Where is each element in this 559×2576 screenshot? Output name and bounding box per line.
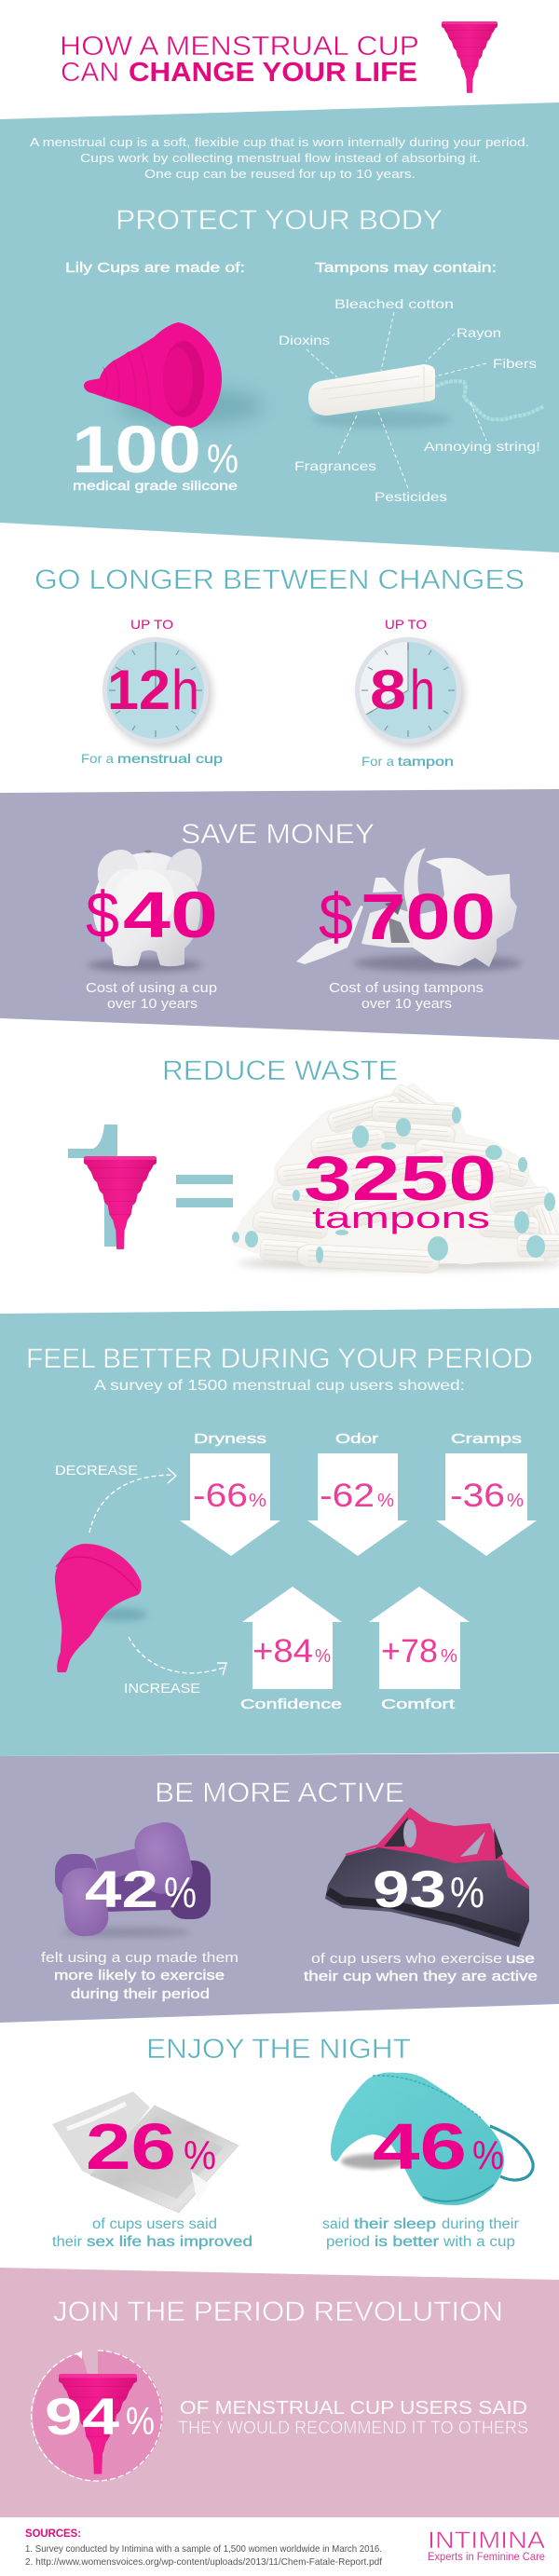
stat arrow: confidence bbox=[240, 1587, 342, 1712]
caption: 93 percent: use bbox=[506, 1951, 535, 1967]
clock: 8 hours: h bbox=[410, 659, 435, 721]
caption: 42 percent: during their period bbox=[71, 1986, 210, 2002]
intro paragraph bbox=[30, 135, 529, 181]
equals sign bbox=[176, 1175, 233, 1207]
tampon ingredient callouts bbox=[279, 296, 540, 504]
purple band background bbox=[0, 789, 559, 1040]
panel: footer bbox=[25, 2528, 545, 2568]
caption: medical grade silicone: medical grade silicone bbox=[73, 478, 238, 493]
arrow: increase curve bbox=[129, 1637, 226, 1675]
stat: 94 percent bbox=[45, 2387, 155, 2446]
stat arrow: comfort: Comfort bbox=[381, 1697, 456, 1712]
caption: 26 percent: sex life has improved bbox=[87, 2234, 252, 2250]
panel: go longer between changes bbox=[34, 565, 525, 769]
purple band background bbox=[0, 1753, 559, 2023]
tampon ingredient callouts: Bleached cotton bbox=[334, 296, 454, 311]
illustration: condom packets bbox=[52, 2092, 239, 2213]
subheading: tampons: Tampons may contain: bbox=[315, 260, 497, 276]
stat arrow: cramps bbox=[436, 1431, 537, 1556]
caption: menstrual cup: For a bbox=[81, 751, 114, 766]
illustration: tilted silicone cup bbox=[84, 322, 222, 429]
stat arrow: dryness: Dryness bbox=[194, 1431, 266, 1447]
caption: tampon cost bbox=[329, 981, 484, 1012]
clock: 12 hours: 12 bbox=[107, 659, 170, 721]
stat arrow: odor bbox=[307, 1431, 408, 1556]
panel: join the period revolution bbox=[0, 2268, 559, 2517]
chart: 94 percent circle bbox=[32, 2348, 163, 2481]
stat arrow: cramps: % bbox=[507, 1491, 524, 1511]
illustration: dumbbells bbox=[55, 1818, 211, 1938]
illustration: pile of tampons bbox=[231, 1083, 559, 1274]
heading: FEEL BETTER DURING YOUR PERIOD bbox=[26, 1343, 533, 1374]
stat: 26 percent bbox=[86, 2110, 216, 2183]
illustration: tilted cup bbox=[55, 1544, 147, 1672]
caption: 26 percent: of cups users said bbox=[92, 2216, 217, 2232]
stat arrow: odor: Odor bbox=[335, 1431, 378, 1447]
stat: 42 percent bbox=[85, 1860, 197, 1918]
intro paragraph: Cups work by collecting menstrual flow instead of absorbing it. bbox=[80, 151, 481, 165]
sources bbox=[25, 2528, 382, 2568]
stat: 100 percent bbox=[72, 414, 239, 487]
panel: feel better during your period bbox=[0, 1308, 559, 1756]
stat arrow: dryness: -66 bbox=[193, 1478, 248, 1514]
heading: BE MORE ACTIVE bbox=[155, 1778, 404, 1808]
caption: 93 percent bbox=[304, 1951, 538, 1984]
title: CAN bbox=[61, 58, 119, 88]
numeral one bbox=[68, 1124, 117, 1247]
up to label left: UP TO bbox=[130, 617, 173, 632]
stat: 700 dollars bbox=[319, 880, 496, 953]
illustration: sports bra bbox=[325, 1807, 529, 1947]
stat arrow: odor: % bbox=[377, 1491, 394, 1511]
stat: 40 dollars: $ bbox=[86, 879, 119, 951]
caption: 46 percent: is better bbox=[375, 2234, 439, 2250]
panel: protect your body bbox=[0, 102, 559, 552]
caption: tampon cost: Cost of using tampons bbox=[329, 981, 484, 996]
clock: 12 hours: h bbox=[171, 659, 199, 721]
caption: cup cost: Cost of using a cup bbox=[86, 981, 217, 996]
up to label right: UP TO bbox=[385, 617, 427, 632]
arrow: decrease curve bbox=[89, 1468, 176, 1533]
stat: 100 percent: 100 bbox=[72, 414, 201, 487]
caption: 93 percent: their cup when they are active bbox=[304, 1969, 538, 1984]
stat arrow: dryness: % bbox=[249, 1491, 266, 1511]
text: recommendation: OF MENSTRUAL CUP USERS SAID bbox=[180, 2398, 527, 2419]
text: recommendation bbox=[178, 2398, 528, 2438]
panel: save money bbox=[0, 789, 559, 1040]
heading: PROTECT YOUR BODY bbox=[116, 205, 443, 236]
tampon ingredient callouts: Dioxins bbox=[279, 333, 330, 348]
stat arrow: cramps: Cramps bbox=[451, 1431, 522, 1447]
stat: 94 percent: % bbox=[126, 2399, 155, 2443]
shadow: cup bbox=[118, 388, 264, 425]
icon: menstrual cup bbox=[442, 21, 498, 93]
stat: 40 dollars bbox=[86, 879, 218, 951]
caption: 42 percent: felt using a cup made them bbox=[41, 1950, 239, 1966]
sources: SOURCES: bbox=[25, 2528, 81, 2540]
heading: SAVE MONEY bbox=[181, 819, 375, 850]
sources: 1. Survey conducted by Intimina with a sample of 1,500 women worldwide in March 2016. bbox=[25, 2543, 382, 2555]
caption: cup cost: over 10 years bbox=[107, 997, 198, 1012]
stat: 26 percent: 26 bbox=[86, 2110, 176, 2183]
panel: reduce waste bbox=[68, 1056, 559, 1274]
stat: 94 percent: 94 bbox=[45, 2387, 119, 2446]
caption: 93 percent: of cup users who exercise bbox=[311, 1951, 502, 1967]
tampon ingredient callouts: Fragrances bbox=[294, 458, 376, 473]
stat arrow: odor: -62 bbox=[320, 1478, 375, 1514]
caption: 26 percent bbox=[52, 2216, 252, 2250]
heading: JOIN THE PERIOD REVOLUTION bbox=[53, 2297, 503, 2327]
label: increase: INCREASE bbox=[124, 1681, 200, 1697]
logo: intimina: INTIMINA bbox=[428, 2528, 545, 2554]
caption: 46 percent: said bbox=[322, 2216, 349, 2232]
caption: menstrual cup: menstrual cup bbox=[117, 751, 223, 766]
stat: 26 percent: % bbox=[184, 2133, 216, 2178]
teal band background bbox=[0, 1308, 559, 1756]
stat: 93 percent: 93 bbox=[373, 1860, 446, 1918]
panel: be more active bbox=[0, 1753, 559, 2023]
stat: 46 percent bbox=[373, 2110, 504, 2183]
title bbox=[60, 32, 419, 88]
subheading: survey: A survey of 1500 menstrual cup users showed: bbox=[94, 1378, 465, 1394]
tampon ingredient callouts: Pesticides bbox=[375, 489, 447, 504]
stat: 40 dollars: 40 bbox=[123, 879, 218, 951]
stat: 42 percent: % bbox=[164, 1868, 197, 1916]
stat arrow: comfort: % bbox=[441, 1646, 457, 1667]
sources: 2. http://www.womensvoices.org/wp-content/uploads/2013/11/Chem-Fatale-Report.pdf bbox=[25, 2556, 382, 2568]
caption: cup cost bbox=[86, 981, 217, 1012]
subheading: lily cups: Lily Cups are made of: bbox=[65, 260, 245, 276]
illustration: sleep mask bbox=[331, 2072, 533, 2205]
panel: enjoy the night bbox=[52, 2034, 533, 2250]
heading: GO LONGER BETWEEN CHANGES bbox=[34, 565, 525, 595]
caption: tampon: tampon bbox=[398, 754, 454, 769]
illustration: broken piggy bank bbox=[296, 848, 522, 972]
stat: 700 dollars: $ bbox=[319, 880, 353, 953]
caption: 46 percent bbox=[322, 2216, 519, 2250]
caption: 46 percent: period bbox=[326, 2234, 370, 2250]
stat: 93 percent: % bbox=[450, 1868, 484, 1916]
caption: tampon bbox=[361, 754, 454, 769]
stat arrow: confidence: % bbox=[315, 1646, 331, 1667]
tampon ingredient callouts: Annoying string! bbox=[424, 439, 540, 454]
stat arrow: confidence: +84 bbox=[252, 1633, 313, 1670]
caption: 42 percent bbox=[41, 1950, 239, 2002]
stat: 3250 tampons: 3250 bbox=[304, 1143, 497, 1214]
title: CHANGE YOUR LIFE bbox=[129, 58, 417, 88]
stat arrow: cramps: -36 bbox=[450, 1478, 505, 1514]
illustration: tampon with string bbox=[308, 364, 544, 429]
stat arrow: dryness bbox=[180, 1431, 280, 1556]
stat arrow: comfort: +78 bbox=[381, 1633, 438, 1670]
teal band background bbox=[0, 102, 559, 552]
stat: 100 percent: % bbox=[207, 436, 239, 482]
caption: tampon: For a bbox=[361, 754, 394, 769]
caption: menstrual cup bbox=[81, 751, 223, 766]
caption: 46 percent: with a cup bbox=[443, 2234, 515, 2250]
intro paragraph: One cup can be reused for up to 10 years. bbox=[144, 167, 416, 181]
heading: REDUCE WASTE bbox=[162, 1056, 398, 1086]
intro paragraph: A menstrual cup is a soft, flexible cup that is worn internally during your period. bbox=[30, 135, 529, 149]
caption: 26 percent: their bbox=[52, 2234, 82, 2250]
clock: 8 hours: 8 bbox=[370, 659, 406, 721]
clock: 8 hours bbox=[355, 637, 465, 747]
panel: header bbox=[60, 21, 498, 93]
clock: 12 hours bbox=[102, 637, 212, 747]
label: decrease: DECREASE bbox=[55, 1463, 138, 1479]
stat: 93 percent bbox=[373, 1860, 484, 1918]
stat: 46 percent: 46 bbox=[373, 2110, 467, 2183]
stat: 3250 tampons bbox=[304, 1143, 497, 1234]
stat: 42 percent: 42 bbox=[85, 1860, 158, 1918]
caption: 46 percent: their sleep bbox=[354, 2216, 436, 2232]
stat arrow: comfort bbox=[369, 1587, 470, 1712]
title: HOW A MENSTRUAL CUP bbox=[60, 32, 419, 61]
text: recommendation: THEY WOULD RECOMMEND IT TO OTHERS bbox=[178, 2419, 528, 2438]
caption: tampon cost: over 10 years bbox=[361, 997, 452, 1012]
logo: intimina: Experts in Feminine Care bbox=[428, 2552, 545, 2563]
stat: 46 percent: % bbox=[472, 2133, 504, 2178]
heading: ENJOY THE NIGHT bbox=[146, 2034, 411, 2065]
pink band background bbox=[0, 2268, 559, 2517]
icon: cup bbox=[84, 1156, 157, 1249]
stat: 700 dollars: 700 bbox=[361, 880, 496, 953]
tampon ingredient callouts: Rayon bbox=[457, 325, 501, 340]
caption: 42 percent: more likely to exercise bbox=[54, 1968, 225, 1983]
caption: 46 percent: during their bbox=[442, 2216, 519, 2232]
stat: 3250 tampons: tampons bbox=[312, 1201, 490, 1234]
illustration: whole piggy bank bbox=[87, 849, 202, 972]
stat arrow: confidence: Confidence bbox=[240, 1697, 342, 1712]
logo: intimina bbox=[428, 2528, 545, 2563]
tampon ingredient callouts: Fibers bbox=[493, 356, 537, 371]
